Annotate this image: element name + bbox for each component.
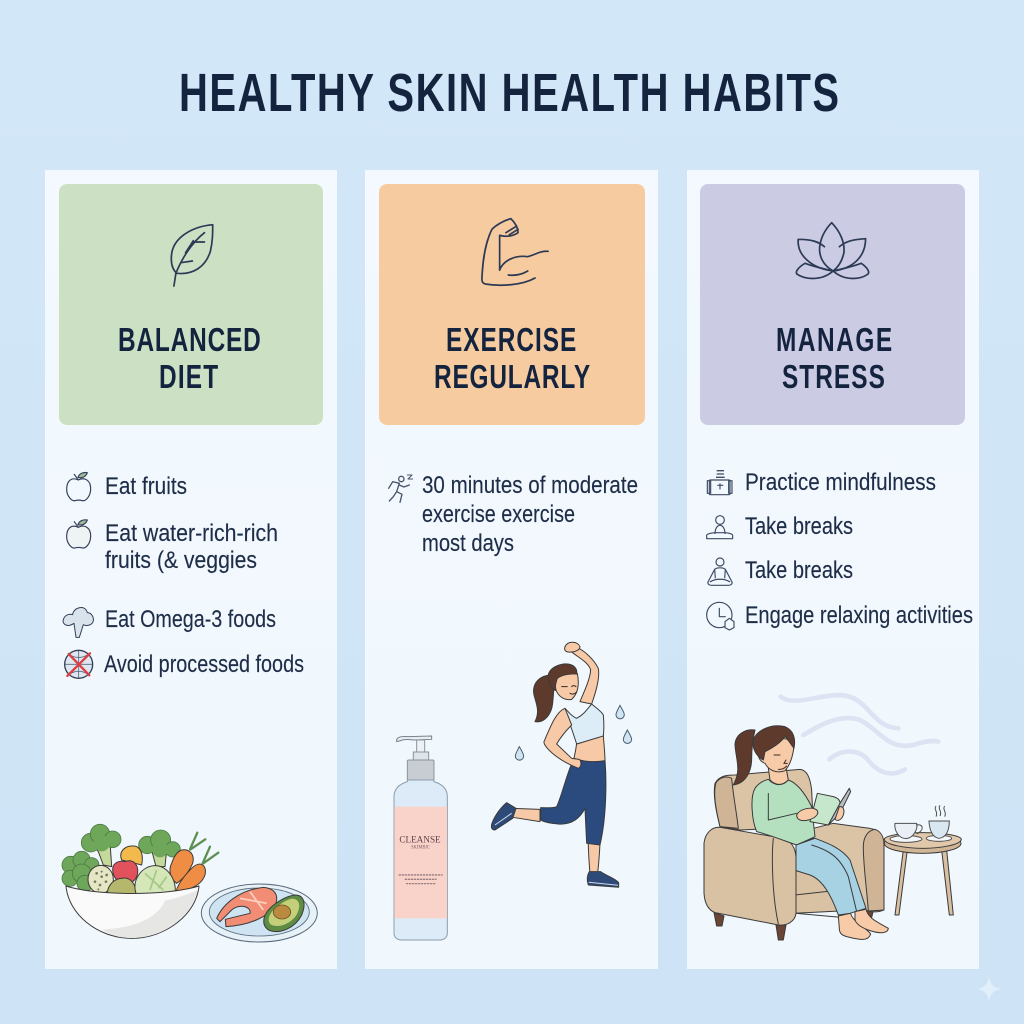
head xyxy=(555,671,578,700)
yellow fruit xyxy=(121,846,142,865)
hands xyxy=(797,808,818,821)
apple xyxy=(113,861,138,884)
list: stress habits xyxy=(707,469,973,630)
broccoli left xyxy=(62,824,121,891)
panel: manage stress xyxy=(687,170,979,969)
text: exercise advice: most days xyxy=(422,530,514,557)
icon: clock xyxy=(707,602,734,630)
leggings xyxy=(541,758,606,845)
list: diet habits xyxy=(63,473,304,678)
text: water-rich fruits: Eat water-rich-rich xyxy=(105,520,278,547)
heading: balanced diet: BALANCED xyxy=(118,323,261,359)
sweat drops xyxy=(515,705,632,760)
heading: manage stress xyxy=(776,323,892,396)
legs xyxy=(513,808,540,822)
illustration: cleanser bottle xyxy=(394,736,447,940)
text: exercise advice xyxy=(422,472,638,557)
title: HEALTHY SKIN HEALTH HABITS xyxy=(179,63,839,124)
sweater xyxy=(752,779,815,845)
text: water-rich fruits xyxy=(105,520,278,574)
icon: meditation desk xyxy=(707,471,732,495)
text: take breaks: Take breaks xyxy=(745,557,853,584)
broccoli right xyxy=(139,830,180,867)
arms xyxy=(544,708,581,768)
torso xyxy=(574,735,605,762)
text: eat fruits: Eat fruits xyxy=(105,473,187,500)
left arm rest xyxy=(704,827,796,925)
icon: apple xyxy=(67,473,91,501)
illustration: cleanser bottle: SKIMBIC xyxy=(411,846,431,851)
icon: lotus xyxy=(796,223,869,278)
heading: manage stress: MANAGE xyxy=(776,323,892,359)
card: balanced diet header xyxy=(59,184,323,425)
shoes xyxy=(491,803,516,830)
right arm rest xyxy=(813,823,884,912)
icon: runner xyxy=(389,475,413,502)
cabbage xyxy=(135,866,175,894)
text: take breaks: Take breaks xyxy=(745,513,853,540)
ponytail xyxy=(733,730,755,785)
panel: exercise regularly xyxy=(365,170,658,969)
icon: apple xyxy=(67,520,91,548)
illustration: salad bowl and salmon plate xyxy=(62,824,317,942)
icon: flexed arm xyxy=(482,219,548,285)
salmon xyxy=(217,887,277,927)
panel: balanced diet xyxy=(45,170,337,969)
text: water-rich fruits: fruits (& veggies xyxy=(105,547,257,574)
chair legs xyxy=(714,911,873,940)
seed slice xyxy=(88,865,113,893)
text: mindfulness: Practice mindfulness xyxy=(745,469,936,496)
heading: exercise regularly: REGULARLY xyxy=(434,360,590,396)
illustration: woman exercising xyxy=(491,642,632,887)
bowl xyxy=(66,886,199,938)
cups xyxy=(890,821,952,842)
text: omega-3: Eat Omega-3 foods xyxy=(105,606,276,633)
card: stress header xyxy=(700,184,965,425)
icon: leaf xyxy=(171,225,213,286)
side table xyxy=(895,850,907,915)
icon: broccoli xyxy=(63,607,93,637)
calm breeze lines xyxy=(781,695,938,773)
neck and head xyxy=(768,767,788,784)
icon: no processed food xyxy=(65,650,93,678)
heading: manage stress: STRESS xyxy=(782,360,885,396)
jeans xyxy=(796,838,866,915)
icon: meditating figure xyxy=(708,558,732,585)
card: exercise header xyxy=(379,184,645,425)
ponytail xyxy=(534,675,554,722)
heading: balanced diet xyxy=(118,323,261,396)
green apple xyxy=(107,878,136,894)
plate xyxy=(201,884,317,942)
text: avoid processed: Avoid processed foods xyxy=(104,651,304,678)
carrots xyxy=(170,850,205,892)
illustration: woman reading in armchair xyxy=(704,695,961,940)
icon: seated figure xyxy=(707,516,733,539)
chair back xyxy=(714,769,813,830)
top xyxy=(565,704,604,744)
sparkle watermark xyxy=(977,977,1001,1001)
avocado xyxy=(264,895,304,932)
text: exercise advice: exercise exercise xyxy=(422,501,575,528)
text: exercise advice: 30 minutes of moderate xyxy=(422,472,638,499)
book xyxy=(810,793,840,825)
illustration: cleanser bottle: CLEANSE xyxy=(399,834,441,845)
heading: balanced diet: DIET xyxy=(159,360,218,396)
heading: exercise regularly xyxy=(434,323,590,396)
heading: exercise regularly: EXERCISE xyxy=(446,323,576,359)
text: relaxing activities: Engage relaxing activities xyxy=(745,602,973,629)
feet xyxy=(838,913,871,939)
seat xyxy=(795,870,860,913)
